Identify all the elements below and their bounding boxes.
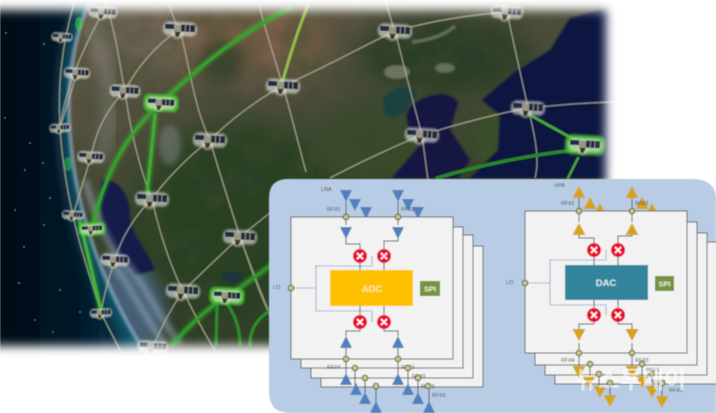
- SPI block: [420, 281, 440, 296]
- labels: RF#3: [421, 384, 434, 390]
- ports: [522, 208, 665, 386]
- labels: RF#4: [561, 358, 574, 364]
- earth surface: [50, 0, 640, 360]
- clouds: [384, 65, 410, 79]
- labels: RF#3: [646, 368, 659, 374]
- ADC block: [330, 270, 413, 306]
- green laser links: [64, 5, 578, 345]
- labels: RF#3: [412, 374, 425, 380]
- labels: [273, 187, 445, 399]
- satellites: [49, 5, 605, 357]
- green lowlands: [135, 120, 345, 310]
- SPI block: SPI: [658, 280, 671, 288]
- labels: RF#1: [561, 201, 574, 207]
- atmosphere glow: [69, 0, 150, 360]
- diagram: DAC transmitter: [506, 183, 716, 408]
- amplifiers: [340, 227, 435, 413]
- mixers: [353, 249, 391, 329]
- blue cloud bands lower limb: [100, 248, 174, 343]
- panel: block diagrams: [269, 179, 716, 413]
- wiring: [579, 211, 662, 398]
- labels: RF#3: [401, 365, 414, 371]
- labels: RF#3: [635, 358, 648, 364]
- labels: LO: [273, 285, 281, 291]
- stacked cards: [291, 217, 483, 387]
- seas: [470, 5, 625, 178]
- HPA antenna triangles: [572, 186, 658, 215]
- stars: [4, 32, 81, 333]
- DAC block: DAC: [596, 278, 616, 289]
- space background: [0, 0, 150, 360]
- LNA antenna triangles: [340, 190, 424, 219]
- brown highlands: [165, 4, 335, 76]
- SPI block: SPI: [424, 284, 436, 294]
- local oscillator dotted lines: [525, 250, 606, 315]
- labels: LO: [506, 280, 514, 286]
- watermark: 뉴스투데이: [576, 367, 686, 394]
- SPI block: [655, 276, 674, 291]
- amplifiers: [572, 223, 668, 408]
- labels: RF#3: [669, 388, 682, 394]
- grid of orbital links: [59, 0, 625, 350]
- ports: [288, 214, 431, 389]
- ADC block: ADC: [362, 284, 382, 295]
- labels: [506, 183, 682, 394]
- labels: RF#4: [327, 365, 340, 371]
- terrain texture: [74, 9, 566, 292]
- mixers: [587, 243, 625, 322]
- local oscillator dotted lines: [291, 256, 372, 322]
- labels: RF#2: [635, 201, 648, 207]
- labels: HPA: [554, 183, 565, 189]
- labels: RF#2: [401, 207, 414, 213]
- DAC block: [565, 265, 648, 300]
- atmosphere rim: [69, 0, 150, 360]
- labels: RF#1: [327, 207, 340, 213]
- labels: RF#3: [432, 393, 445, 399]
- diagram: ADC receiver: [273, 187, 483, 413]
- wiring: [346, 217, 429, 402]
- stacked cards: [525, 211, 716, 384]
- labels: RF#3: [652, 380, 665, 386]
- photo: satellites over earth: [0, 0, 640, 360]
- labels: LNA: [321, 187, 332, 193]
